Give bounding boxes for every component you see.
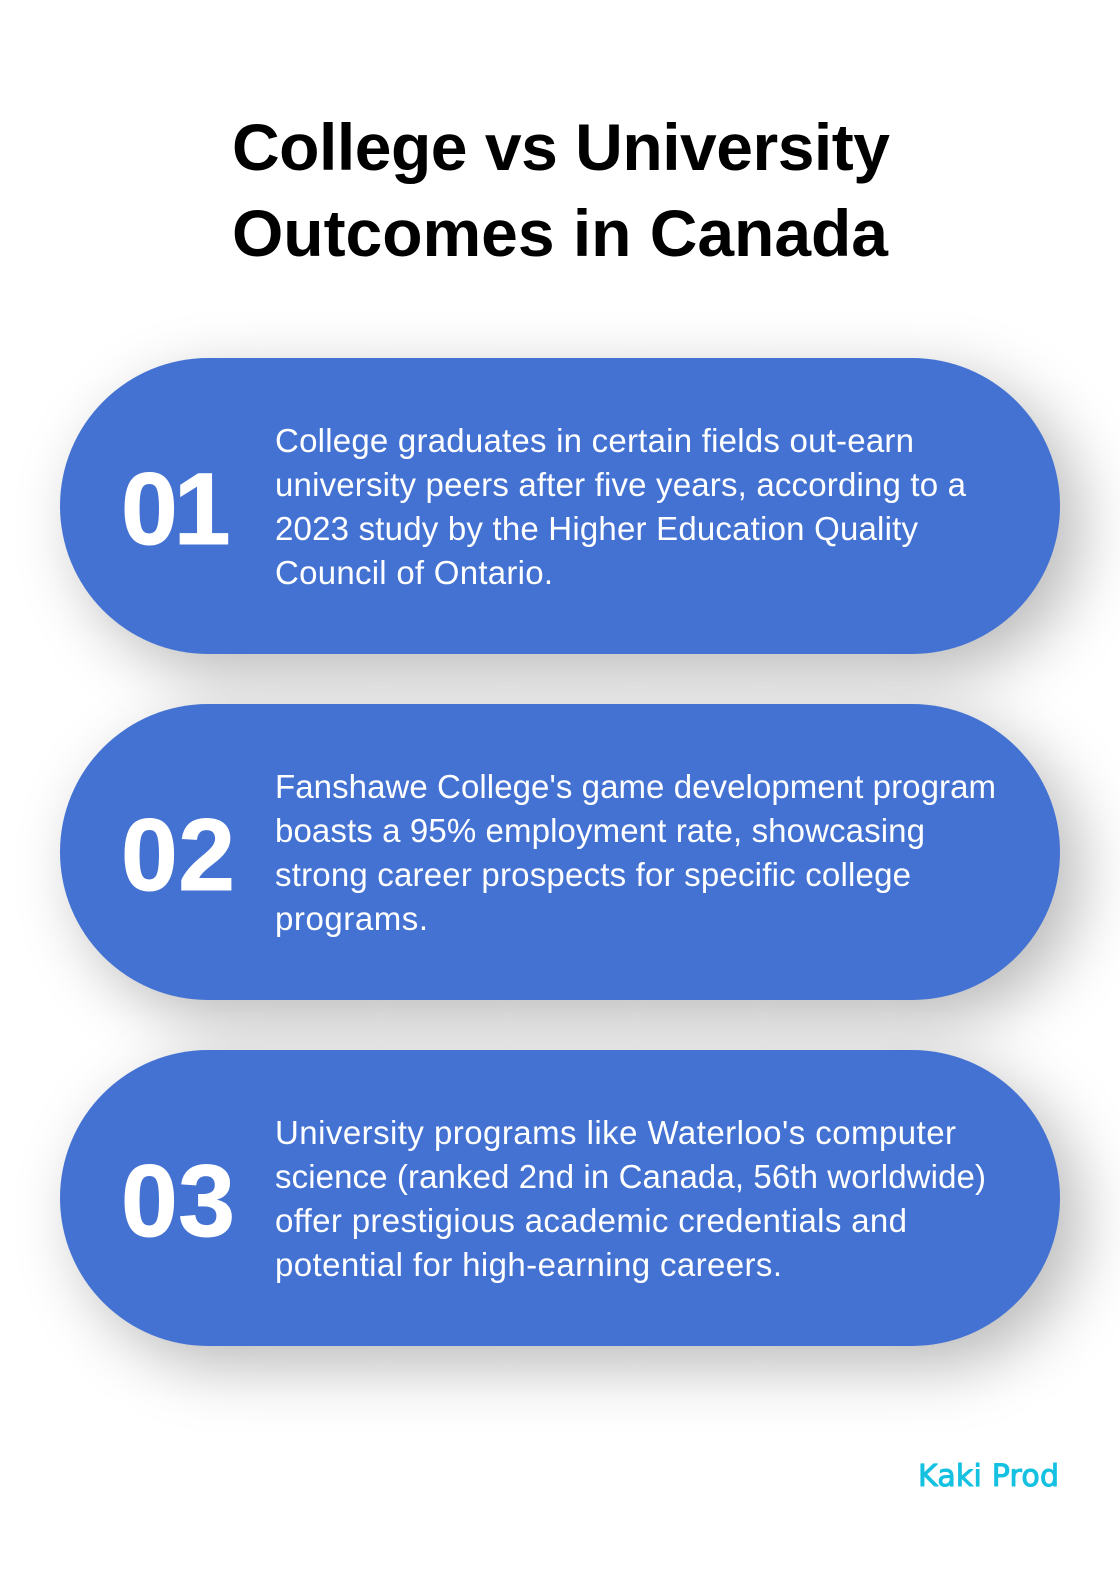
text block 1: 2023 study by the Higher Education Quality — [275, 510, 918, 547]
number 02: 02 — [121, 798, 235, 912]
text block 2: boasts a 95% employment rate, showcasing — [275, 812, 925, 849]
title: College vs University — [232, 110, 890, 184]
text block 1: university peers after five years, according to a — [275, 466, 967, 503]
panel: Fanshawe employment — [60, 704, 1060, 1000]
text block 1 — [275, 422, 967, 591]
number 03: 03 — [121, 1144, 235, 1258]
text block 3: science (ranked 2nd in Canada, 56th worldwide) — [275, 1158, 986, 1195]
title: Outcomes in Canada — [232, 196, 889, 270]
number 01: 01 — [121, 452, 228, 566]
panel: college earnings — [60, 358, 1060, 654]
text block 3: potential for high-earning careers. — [275, 1246, 782, 1283]
text block 2: programs. — [275, 900, 428, 937]
text block 1: Council of Ontario. — [275, 554, 553, 591]
text block 2: Fanshawe College's game development program — [275, 768, 996, 805]
panel: Waterloo computer science — [60, 1050, 1060, 1346]
text block 3 — [275, 1114, 986, 1283]
text block 1: College graduates in certain fields out-earn — [275, 422, 914, 459]
title — [232, 110, 890, 270]
text block 2: strong career prospects for specific college — [275, 856, 911, 893]
text block 3: University programs like Waterloo's computer — [275, 1114, 956, 1151]
text block 3: offer prestigious academic credentials and — [275, 1202, 907, 1239]
text block 2 — [275, 768, 996, 937]
logo: Kaki Prod: Kaki Prod — [918, 1459, 1059, 1494]
